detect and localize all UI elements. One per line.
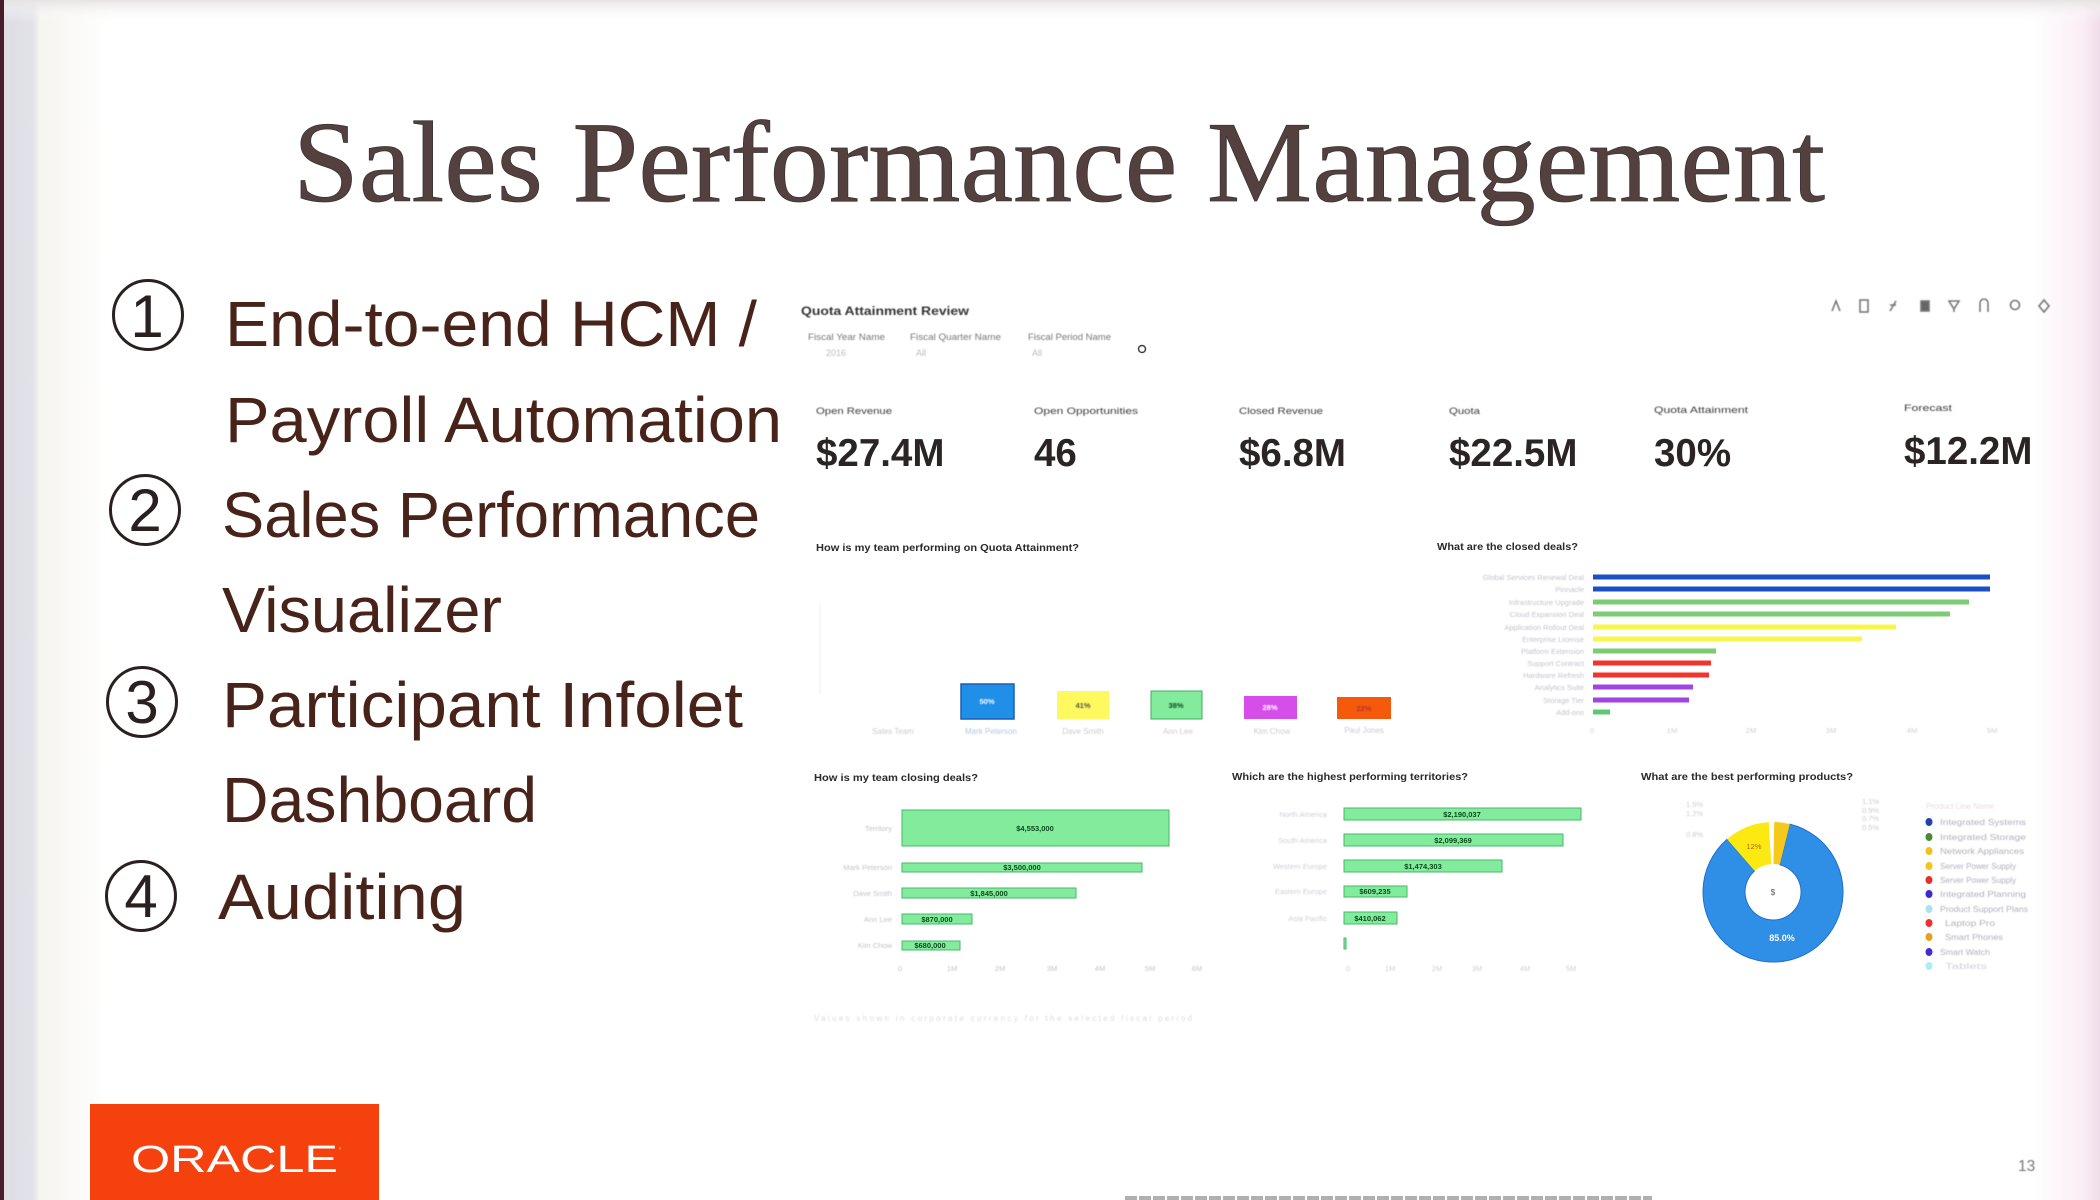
chart: team closing deals bars: $680,000	[914, 941, 946, 950]
list item 1: Payroll Automation	[225, 384, 782, 456]
chart: closed deals bars: 1M	[1667, 726, 1677, 735]
chart: team quota attainment columns: Paul Jones	[1344, 726, 1384, 735]
chart: team closing deals bars: $1,845,000	[970, 889, 1008, 898]
KPI: quota: $22.5M	[1449, 432, 1577, 475]
chart: closed deals bars: Cloud Expansion Deal	[1510, 610, 1584, 619]
chart: team quota attainment columns: Sales Team	[872, 727, 914, 736]
legend: Integrated Storage	[1940, 833, 2027, 842]
chart: team closing deals bars: 1M	[947, 964, 957, 973]
donut side labels: 1.5%	[1686, 800, 1703, 809]
legend: Smart Watch	[1940, 948, 1990, 957]
donut side labels: 1.2%	[1686, 809, 1703, 818]
chart: team quota attainment columns: Kim Chow	[1254, 727, 1290, 736]
chart: team closing deals bars: 0	[898, 964, 902, 973]
legend: Network Appliances	[1940, 847, 2024, 856]
donut side labels: 0.5%	[1862, 823, 1879, 832]
chart: team closing deals bars: 5M	[1145, 964, 1155, 973]
chart: territories bars: South America	[1278, 836, 1328, 845]
chart: team quota attainment columns: 41%	[1075, 701, 1091, 710]
chart: territories bars: 4M	[1520, 964, 1530, 973]
chart: products donut: What are the best performing products?	[1641, 772, 1853, 783]
dashboard header: 2016	[826, 348, 846, 358]
donut: $	[1771, 888, 1776, 897]
list item 3	[108, 668, 743, 836]
KPI: quota attainment	[1654, 405, 1748, 475]
chart: closed deals bars: Storage Tier	[1543, 696, 1584, 705]
KPI: quota attainment: 30%	[1654, 432, 1731, 475]
chart: territories bars: Which are the highest performing territories?	[1232, 772, 1468, 783]
toolbar icons	[1832, 299, 2049, 312]
dashboard header: All	[1032, 348, 1042, 358]
legend: Integrated Planning	[1940, 890, 2026, 899]
chart: territories bars: $609,235	[1359, 887, 1391, 896]
chart: territories bars: $1,474,303	[1404, 862, 1442, 871]
chart: team closing deals bars: Dave Smith	[853, 889, 892, 898]
chart: territories bars: North America	[1279, 810, 1328, 819]
chart: team quota attainment columns: How is my team performing on Quota Attainment?	[816, 543, 1079, 554]
KPI: forecast	[1904, 403, 2032, 473]
dashboard header: Fiscal Year Name	[808, 332, 885, 342]
chart: closed deals bars: Platform Extension	[1521, 647, 1584, 656]
KPI: open opportunities: Open Opportunities	[1034, 406, 1138, 417]
chart: closed deals bars: 5M	[1987, 726, 1997, 735]
chart: territories bars	[1232, 772, 1581, 973]
legend: Server Power Supply	[1940, 862, 2016, 871]
chart: territories bars: 1M	[1385, 964, 1395, 973]
KPI: closed revenue: Closed Revenue	[1239, 406, 1323, 417]
legend: Product Line Name	[1926, 802, 1995, 811]
list item 3: 3	[125, 669, 159, 736]
legend: Server Power Supply	[1940, 876, 2016, 885]
chart: team closing deals bars: $870,000	[921, 915, 953, 924]
dashboard header: Quota Attainment Review	[801, 304, 970, 318]
KPI: quota	[1449, 406, 1577, 475]
KPI: closed revenue	[1239, 406, 1346, 475]
dashboard header: Fiscal Quarter Name	[910, 332, 1001, 342]
chart: team closing deals bars: 6M	[1192, 964, 1202, 973]
donut side labels: 1.1%	[1862, 797, 1879, 806]
chart: team quota attainment columns	[816, 543, 1391, 736]
chart: territories bars: 2M	[1432, 964, 1442, 973]
chart: closed deals bars: Hardware Refresh	[1523, 671, 1584, 680]
chart: closed deals bars: 0	[1590, 726, 1594, 735]
bottom edge line	[1125, 1196, 1652, 1200]
chart: team closing deals bars: 2M	[995, 964, 1005, 973]
KPI: forecast: $12.2M	[1904, 430, 2032, 473]
KPI: quota: Quota	[1449, 406, 1481, 417]
legend	[1926, 802, 2028, 971]
legend: Laptop Pro	[1945, 919, 1996, 928]
list item 2: 2	[128, 477, 162, 544]
chart: closed deals bars: Add-ons	[1556, 708, 1584, 717]
chart: closed deals bars: Application Rollout Deal	[1504, 623, 1584, 632]
list item 2: Visualizer	[222, 574, 502, 646]
KPI: closed revenue: $6.8M	[1239, 432, 1346, 475]
list item 1: End-to-end HCM /	[225, 288, 757, 360]
KPI: open revenue: $27.4M	[816, 432, 944, 475]
list item 4: 4	[124, 863, 158, 930]
chart: team closing deals bars: Territory	[865, 824, 892, 833]
chart: team quota attainment columns: Mark Peterson	[965, 727, 1017, 736]
list item 3: Participant Infolet	[222, 669, 743, 741]
list item 2: Sales Performance	[222, 479, 760, 551]
chart: territories bars: 3M	[1472, 964, 1482, 973]
chart: territories bars: $2,099,369	[1434, 836, 1472, 845]
list item 4	[106, 861, 466, 933]
donut side labels: 0.7%	[1862, 814, 1879, 823]
chart: team closing deals bars: Mark Peterson	[843, 863, 892, 872]
chart: team quota attainment columns: Ann Lee	[1163, 727, 1193, 736]
KPI: open opportunities: 46	[1034, 432, 1077, 475]
chart: team closing deals bars: 3M	[1047, 964, 1057, 973]
chart: team closing deals bars: Kim Chow	[858, 941, 893, 950]
legend: Tablets	[1945, 962, 1987, 971]
chart: team closing deals bars: $3,500,000	[1003, 863, 1041, 872]
chart: team closing deals bars	[814, 773, 1202, 1023]
list item 4: Auditing	[218, 861, 466, 933]
Oracle logo block: '	[339, 1146, 341, 1156]
chart: closed deals bars: Global Services Renewal Deal	[1483, 573, 1584, 582]
donut: 85.0%	[1769, 933, 1795, 943]
legend: Product Support Plans	[1940, 905, 2028, 914]
chart: closed deals bars: 3M	[1826, 726, 1836, 735]
chart: closed deals bars: Infrastructure Upgrade	[1509, 598, 1584, 607]
KPI row	[816, 403, 2032, 475]
title: Sales Performance Management	[293, 99, 1825, 226]
chart: territories bars: $2,190,037	[1443, 810, 1481, 819]
list item 3: Dashboard	[222, 764, 537, 836]
Oracle logo block: ORACLE	[131, 1139, 338, 1181]
list item 1: 1	[130, 283, 164, 350]
chart: team quota attainment columns: Dave Smith	[1062, 727, 1104, 736]
dashboard header: All	[916, 348, 926, 358]
chart: territories bars: Eastern Europe	[1275, 887, 1327, 896]
chart: team closing deals bars: Values shown in corporate currency for the selected fiscal period	[814, 1014, 1192, 1023]
chart: closed deals bars: 4M	[1907, 726, 1917, 735]
chart: territories bars: Asia Pacific	[1288, 914, 1327, 923]
chart: closed deals bars	[1437, 542, 1997, 735]
chart: team closing deals bars: How is my team closing deals?	[814, 773, 978, 784]
donut side labels: 0.9%	[1862, 806, 1879, 815]
page number: 13	[2018, 1158, 2035, 1175]
KPI: open opportunities	[1034, 406, 1138, 475]
chart: territories bars: 0	[1346, 964, 1350, 973]
KPI: forecast: Forecast	[1904, 403, 1952, 414]
chart: closed deals bars: Analytics Suite	[1535, 683, 1584, 692]
list item 2	[110, 476, 760, 646]
chart: team quota attainment columns: 22%	[1356, 704, 1372, 713]
Oracle logo block	[90, 1104, 379, 1200]
chart: team closing deals bars: Ann Lee	[864, 915, 892, 924]
donut side labels: 0.8%	[1686, 830, 1703, 839]
chart: team closing deals bars: 4M	[1095, 964, 1105, 973]
donut	[1703, 822, 1843, 962]
chart: closed deals bars: 2M	[1746, 726, 1756, 735]
chart: team quota attainment columns: 28%	[1262, 703, 1278, 712]
chart: closed deals bars: What are the closed deals?	[1437, 542, 1578, 553]
chart: team quota attainment columns: 50%	[979, 697, 995, 706]
chart: closed deals bars: Support Contract	[1527, 659, 1585, 668]
chart: closed deals bars: Enterprise License	[1522, 635, 1584, 644]
chart: territories bars: 5M	[1566, 964, 1576, 973]
dashboard header: Fiscal Period Name	[1028, 332, 1111, 342]
chart: team quota attainment columns: 38%	[1168, 701, 1184, 710]
donut: 12%	[1746, 842, 1762, 851]
chart: closed deals bars: Pinnacle	[1555, 585, 1584, 594]
chart: territories bars: $410,062	[1354, 914, 1386, 923]
legend: Integrated Systems	[1940, 818, 2026, 827]
legend: Smart Phones	[1945, 933, 2003, 942]
list item 1	[114, 280, 782, 456]
chart: products donut	[1641, 772, 2028, 971]
chart: territories bars: Western Europe	[1273, 862, 1327, 871]
KPI: quota attainment: Quota Attainment	[1654, 405, 1748, 416]
KPI: open revenue: Open Revenue	[816, 406, 892, 417]
KPI: open revenue	[816, 406, 944, 475]
dashboard header	[801, 304, 1146, 358]
numbered list	[106, 280, 782, 933]
donut side labels	[1686, 797, 1879, 839]
chart: team closing deals bars: $4,553,000	[1016, 824, 1054, 833]
